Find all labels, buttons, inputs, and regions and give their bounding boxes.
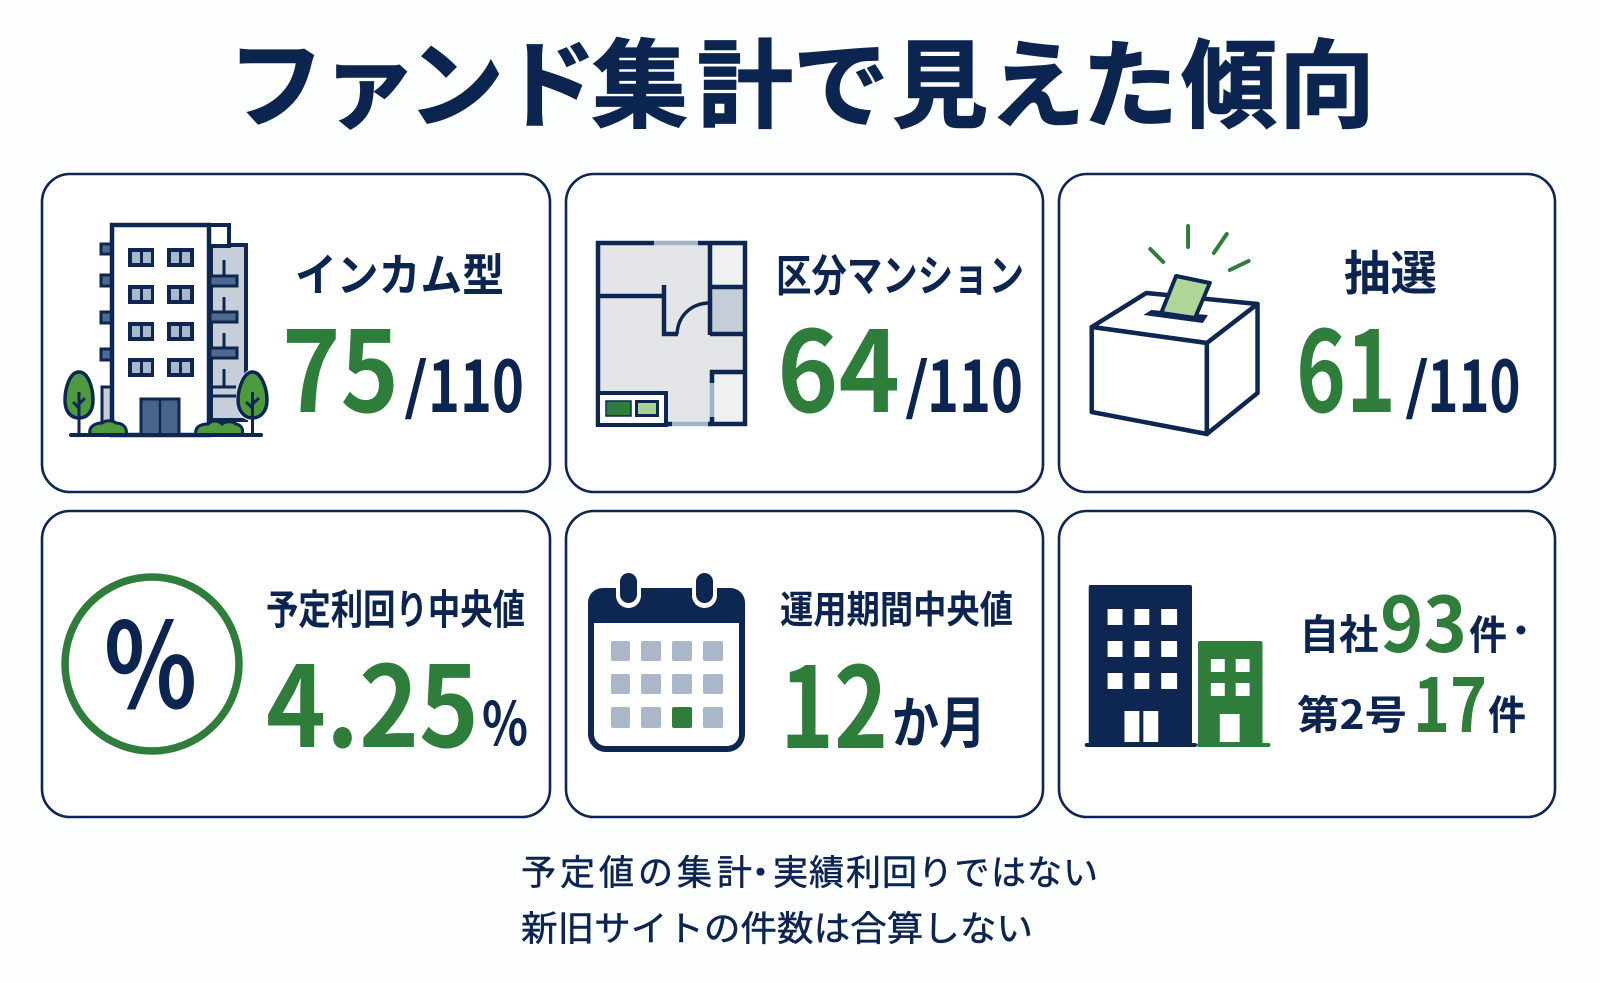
panel: own company and type 2 counts (1059, 511, 1555, 817)
footnote: 新旧サイトの件数は合算しない (521, 901, 1033, 952)
denominator (905, 331, 1023, 433)
text: type 2 count: 17 (1413, 647, 1487, 754)
label: 抽選 (1344, 235, 1437, 304)
text: type 2 count: 件 (1488, 683, 1526, 741)
title: ファンド集計で見えた傾向 (228, 8, 1375, 148)
text: own company count (1300, 564, 1526, 674)
unit: か月 (892, 679, 986, 760)
label: 予定利回り中央値 (266, 576, 525, 636)
icon: percent circle (65, 571, 239, 751)
value: 12 (780, 619, 888, 781)
denominator: / (905, 336, 929, 426)
icon: floor plan (596, 241, 747, 426)
icon: calendar (588, 566, 745, 749)
value: 61 (1296, 283, 1396, 445)
value: 64 (777, 283, 900, 445)
label: インカム型 (295, 239, 504, 304)
panel: income type (42, 174, 550, 492)
denominator: 110 (1428, 331, 1520, 433)
value: 4.25 (266, 618, 479, 780)
text: own company count: 件 (1469, 603, 1507, 661)
text: type 2 count (1297, 647, 1526, 754)
value: 75 (282, 283, 399, 445)
text: own company count: 自社 (1300, 601, 1378, 661)
denominator (1405, 331, 1520, 433)
label: 区分マンション (776, 240, 1024, 304)
footnote: 予定値の集計・実績利回りではない (521, 845, 1098, 896)
icon: ballot box (1092, 226, 1258, 434)
label: 運用期間中央値 (780, 579, 1013, 634)
panel: compartment condo (566, 174, 1043, 492)
denominator (404, 331, 524, 433)
denominator: 110 (428, 331, 524, 433)
denominator: / (404, 336, 428, 426)
icon: percent circle: % (104, 571, 197, 742)
footnote (521, 845, 1098, 952)
icon: two buildings (1085, 585, 1270, 747)
icon: apartment building (65, 225, 269, 437)
denominator: / (1405, 336, 1429, 426)
text: type 2 count: 第2号 (1297, 683, 1407, 741)
text: own company count: 93 (1380, 564, 1467, 674)
denominator: 110 (927, 331, 1023, 433)
panel: lottery (1059, 174, 1555, 492)
panel: median term (566, 511, 1043, 817)
panel: median planned yield (42, 511, 550, 817)
percent unit: % (482, 676, 528, 763)
